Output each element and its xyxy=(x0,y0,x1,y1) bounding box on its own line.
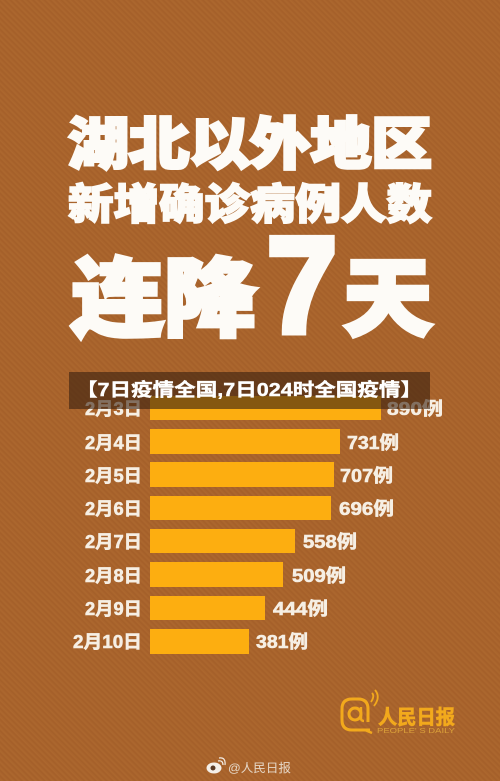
row 2月8日: 2月8日 xyxy=(85,566,142,586)
row 2月3日 xyxy=(85,396,443,420)
icon: Weibo xyxy=(206,758,225,774)
row 2月10日: 2月10日 xyxy=(73,632,142,652)
row 2月9日: 444例 xyxy=(273,599,328,619)
row 2月4日: 731例 xyxy=(347,433,399,453)
caption banner xyxy=(69,372,430,409)
row 2月6日: 2月6日 xyxy=(85,499,142,519)
banner text: 【7日疫情全国,7日024时全国疫情】 xyxy=(76,379,422,400)
title line 1: 湖北以外地区 xyxy=(68,100,432,181)
row 2月6日 xyxy=(85,496,394,520)
Weibo watermark xyxy=(206,758,291,775)
row 2月10日 xyxy=(73,629,308,654)
row 2月7日 xyxy=(85,529,357,553)
logo name: 人民日报 xyxy=(378,706,455,729)
row 2月5日 xyxy=(85,462,393,487)
row 2月5日: 2月5日 xyxy=(85,466,142,486)
title xyxy=(68,100,433,361)
row 2月4日: 2月4日 xyxy=(85,433,142,453)
row 2月3日: 890例 xyxy=(387,399,443,419)
watermark text: @人民日报 xyxy=(228,760,291,775)
title line 3: days character: 天 xyxy=(343,229,433,354)
row 2月6日: 696例 xyxy=(339,499,394,519)
bar chart xyxy=(73,396,443,654)
row 2月8日 xyxy=(85,562,346,587)
title line 3: falling characters: 连降 xyxy=(71,229,257,354)
row 2月4日 xyxy=(85,429,399,454)
title line 3: number seven: 7 xyxy=(267,209,337,361)
row 2月7日: 558例 xyxy=(303,532,357,552)
logo English name: PEOPLE' S DAILY xyxy=(377,728,455,735)
row 2月8日: 509例 xyxy=(292,566,346,586)
icon: at sign speech bubble xyxy=(342,690,378,733)
row 2月9日 xyxy=(85,596,328,620)
row 2月3日: 2月3日 xyxy=(85,399,142,419)
row 2月9日: 2月9日 xyxy=(85,599,142,619)
row 2月5日: 707例 xyxy=(340,466,393,486)
People's Daily logo xyxy=(342,690,455,735)
banner background xyxy=(69,372,430,409)
row 2月7日: 2月7日 xyxy=(85,532,142,552)
title line 2: 新增确诊病例人数 xyxy=(68,171,432,232)
row 2月10日: 381例 xyxy=(256,632,308,652)
